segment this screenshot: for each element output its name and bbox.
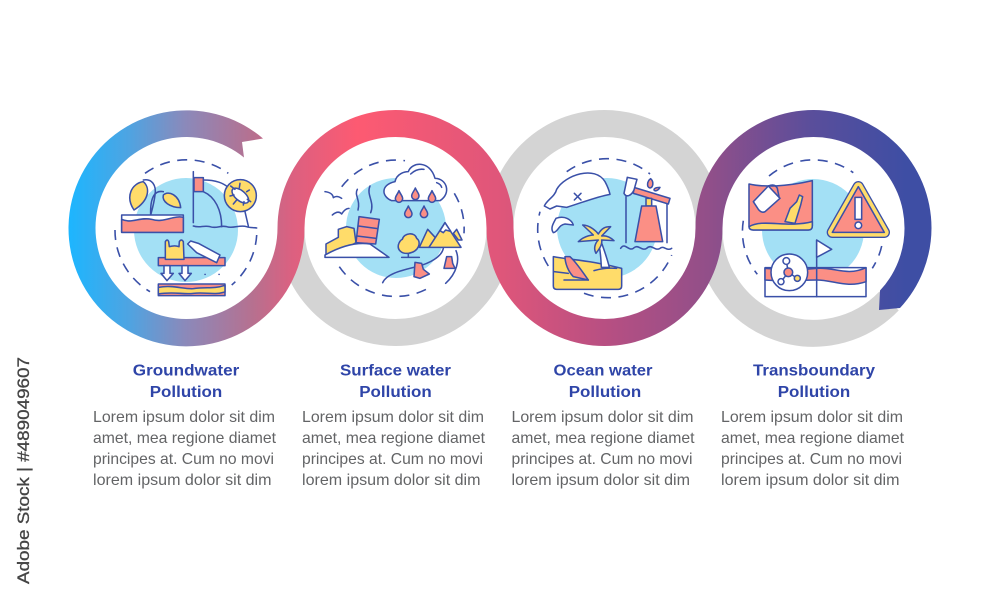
text block: ocean water pollution: Pollution — [569, 384, 641, 401]
text block: transboundary pollution: lorem ipsum dolor sit dim — [721, 472, 900, 489]
text block: surface water pollution — [302, 362, 486, 489]
text block: surface water pollution: Lorem ipsum dolor sit dim — [302, 409, 484, 426]
text block: transboundary pollution: amet, mea regione diamet — [721, 430, 905, 447]
text block: transboundary pollution: principes at. Cum no movi — [721, 451, 902, 468]
text block: surface water pollution: principes at. Cum no movi — [302, 451, 483, 468]
text block: surface water pollution: amet, mea regione diamet — [302, 430, 486, 447]
stock id label, rotated: Adobe Stock | #489049607 — [14, 357, 33, 584]
text block: groundwater pollution: Lorem ipsum dolor sit dim — [93, 409, 275, 426]
icon: surface water pollution — [325, 160, 464, 296]
text block: ocean water pollution — [512, 362, 695, 489]
text block: transboundary pollution: Pollution — [778, 384, 850, 401]
text block: ocean water pollution: Lorem ipsum dolor sit dim — [512, 409, 694, 426]
text block: transboundary pollution — [721, 362, 905, 489]
text block: ocean water pollution: lorem ipsum dolor sit dim — [512, 472, 690, 489]
icon: ocean water pollution — [538, 159, 672, 298]
icon: groundwater pollution — [115, 160, 257, 296]
text block: groundwater pollution: Groundwater — [133, 362, 239, 380]
gradient ribbon connecting the four circles — [69, 110, 931, 346]
text block: transboundary pollution: Lorem ipsum dolor sit dim — [721, 409, 903, 426]
text block: ocean water pollution: Ocean water — [554, 362, 652, 380]
text block: transboundary pollution: Transboundary — [753, 362, 875, 380]
grey ribbon behind the circles — [291, 123, 889, 333]
text block: groundwater pollution: lorem ipsum dolor sit dim — [93, 472, 272, 489]
text block: groundwater pollution: principes at. Cum no movi — [93, 451, 274, 468]
text block: surface water pollution: Surface water — [340, 362, 451, 380]
text block: ocean water pollution: amet, mea regione diamet — [512, 430, 695, 447]
text block: surface water pollution: Pollution — [359, 384, 432, 401]
icon: transboundary pollution — [742, 160, 884, 297]
text block: ocean water pollution: principes at. Cum no movi — [512, 451, 692, 468]
text block: groundwater pollution: Pollution — [150, 384, 222, 401]
text block: groundwater pollution: amet, mea regione diamet — [93, 430, 277, 447]
text block: groundwater pollution — [93, 362, 277, 489]
text block: surface water pollution: lorem ipsum dolor sit dim — [302, 472, 480, 489]
